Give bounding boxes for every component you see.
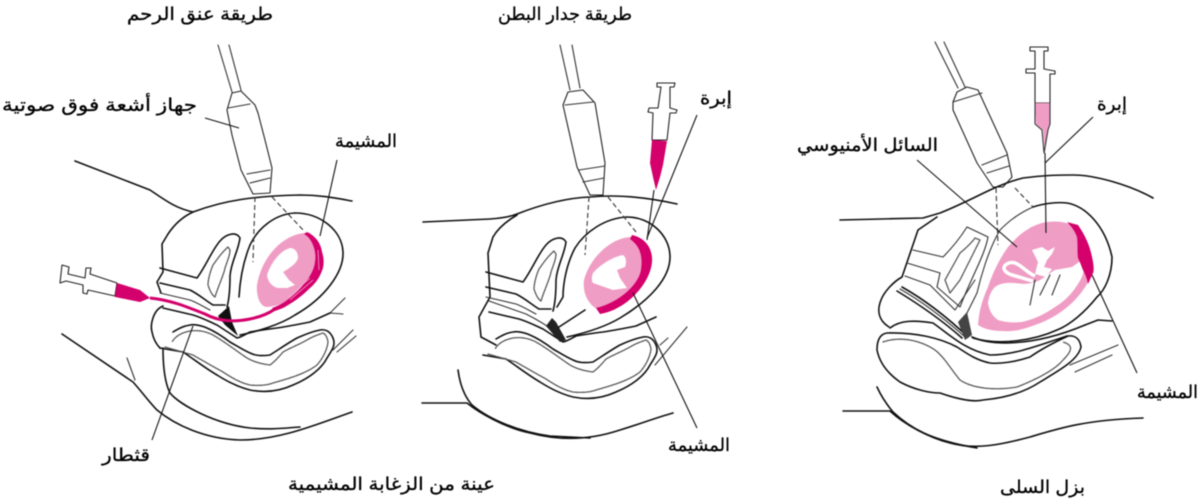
label: ultrasound device: جهاز أشعة فوق صوتية bbox=[2, 93, 197, 116]
bladder and vagina bbox=[486, 238, 566, 334]
rectum bbox=[160, 325, 334, 391]
uterus outline bbox=[567, 217, 670, 337]
label: placenta bbox=[1092, 275, 1198, 402]
label: catheter bbox=[101, 326, 193, 465]
icon: ultrasound probe bbox=[935, 42, 1012, 187]
fetus bbox=[267, 248, 298, 288]
label: ultrasound device bbox=[2, 93, 239, 128]
fetus and body bbox=[988, 247, 1084, 322]
label: needle bbox=[1045, 94, 1127, 163]
placenta dark pink bbox=[272, 232, 324, 311]
label: amniotic fluid: السائل الأمنيوسي bbox=[797, 134, 938, 156]
label: placenta bbox=[633, 293, 730, 455]
caption: chorionic villus sampling: عينة من الزغابة المشيمية bbox=[288, 474, 495, 495]
caption: amniocentesis: بزل السلى bbox=[1000, 477, 1085, 498]
body outline: skin and abdomen bbox=[840, 175, 1153, 448]
heading: transabdominal method: طريقة جدار البطن bbox=[498, 4, 632, 25]
icon: ultrasound probe bbox=[218, 45, 272, 194]
uterus outline bbox=[973, 203, 1112, 342]
label: placenta: المشيمة bbox=[668, 435, 730, 455]
panel: transcervical method bbox=[2, 4, 397, 465]
scan beam dashed lines bbox=[585, 197, 636, 255]
body outline: skin and abdomen bbox=[62, 161, 356, 440]
fetal sac light pink bbox=[584, 237, 650, 310]
bladder and vagina bbox=[151, 234, 330, 348]
vagina band bbox=[890, 287, 1085, 355]
bladder bbox=[905, 227, 988, 310]
panel: amniocentesis bbox=[797, 42, 1198, 448]
scan beam dashed lines bbox=[996, 188, 1033, 245]
label: needle: إبرة bbox=[1097, 94, 1127, 115]
label: catheter: قثطار bbox=[101, 445, 150, 465]
label: placenta bbox=[320, 131, 397, 236]
scan beam dashed lines bbox=[253, 197, 305, 262]
label: placenta: المشيمة bbox=[1137, 382, 1198, 402]
heading: transcervical method: طريقة عنق الرحم bbox=[127, 4, 273, 25]
cord to placenta bbox=[559, 310, 585, 327]
placenta dark pink bbox=[596, 235, 652, 314]
label: needle bbox=[647, 88, 732, 238]
rectum bbox=[483, 332, 657, 398]
cervix dark line bbox=[546, 318, 566, 342]
body outline: skin and abdomen bbox=[422, 196, 687, 438]
uterus outline bbox=[240, 213, 343, 335]
cervix dark wedge bbox=[218, 306, 238, 336]
lower vagina band bbox=[489, 312, 656, 342]
icon: syringe and needle bbox=[1026, 47, 1055, 233]
icon: ultrasound probe bbox=[560, 45, 605, 195]
catheter bbox=[150, 298, 275, 321]
amniotic sac light pink bbox=[978, 222, 1092, 331]
rectum bbox=[877, 333, 1081, 401]
fetal sac light pink bbox=[257, 233, 322, 307]
panel: transabdominal method bbox=[422, 4, 732, 455]
fetus bbox=[592, 255, 627, 290]
icon: syringe and needle bbox=[647, 83, 677, 240]
icon: syringe bbox=[60, 265, 150, 302]
label: amniotic fluid bbox=[797, 134, 1017, 247]
label: needle: إبرة bbox=[700, 88, 732, 109]
placenta dark pink bbox=[1067, 222, 1094, 284]
label: placenta: المشيمة bbox=[335, 131, 397, 151]
